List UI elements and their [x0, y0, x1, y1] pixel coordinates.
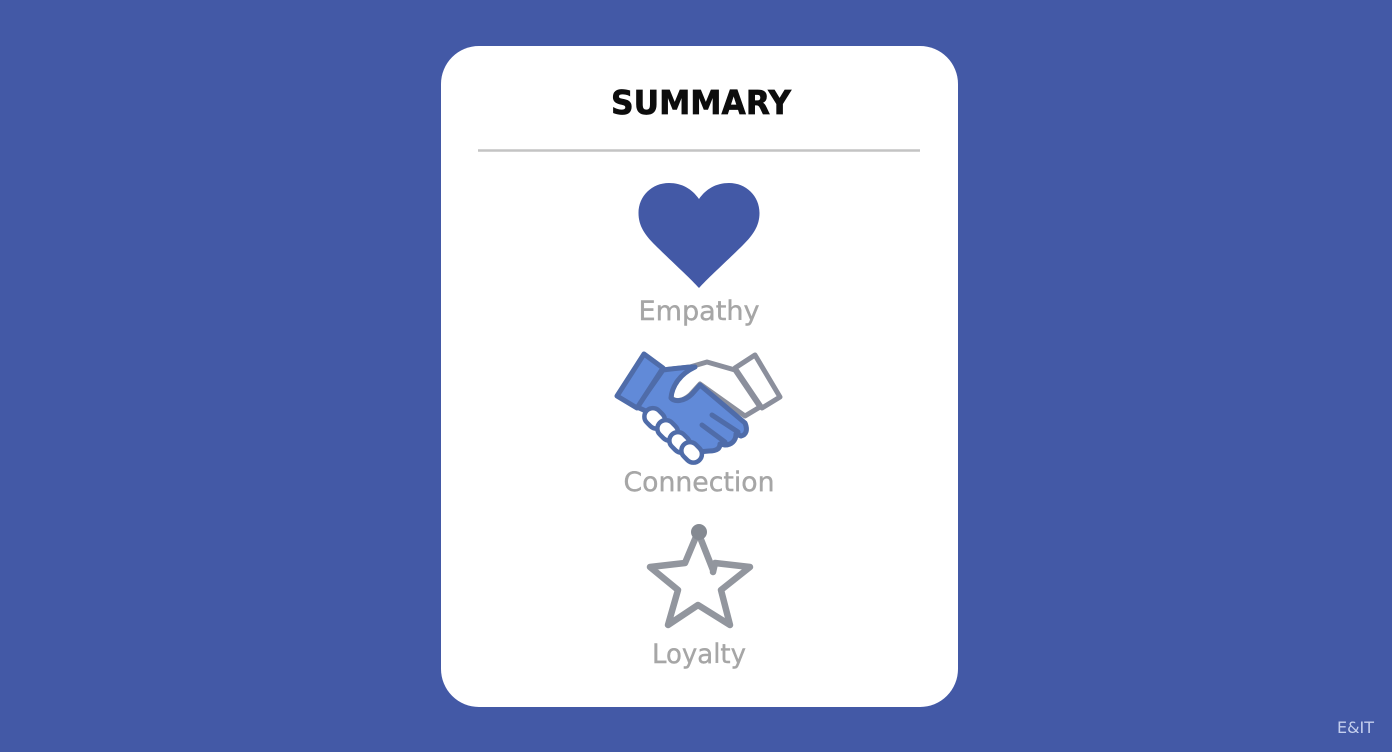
- icon: heart: [638, 183, 760, 288]
- blue hand: [617, 354, 746, 466]
- panel: summary card: [441, 46, 958, 707]
- label: connection: Connection: [624, 467, 774, 498]
- title: SUMMARY: [611, 83, 792, 122]
- label: empathy: Empathy: [638, 296, 760, 327]
- icon: handshake: [617, 354, 780, 466]
- watermark logo: E&IT: [1337, 718, 1374, 737]
- icon: star: [650, 524, 750, 625]
- label: loyalty: Loyalty: [652, 639, 746, 670]
- white hand: [663, 355, 780, 416]
